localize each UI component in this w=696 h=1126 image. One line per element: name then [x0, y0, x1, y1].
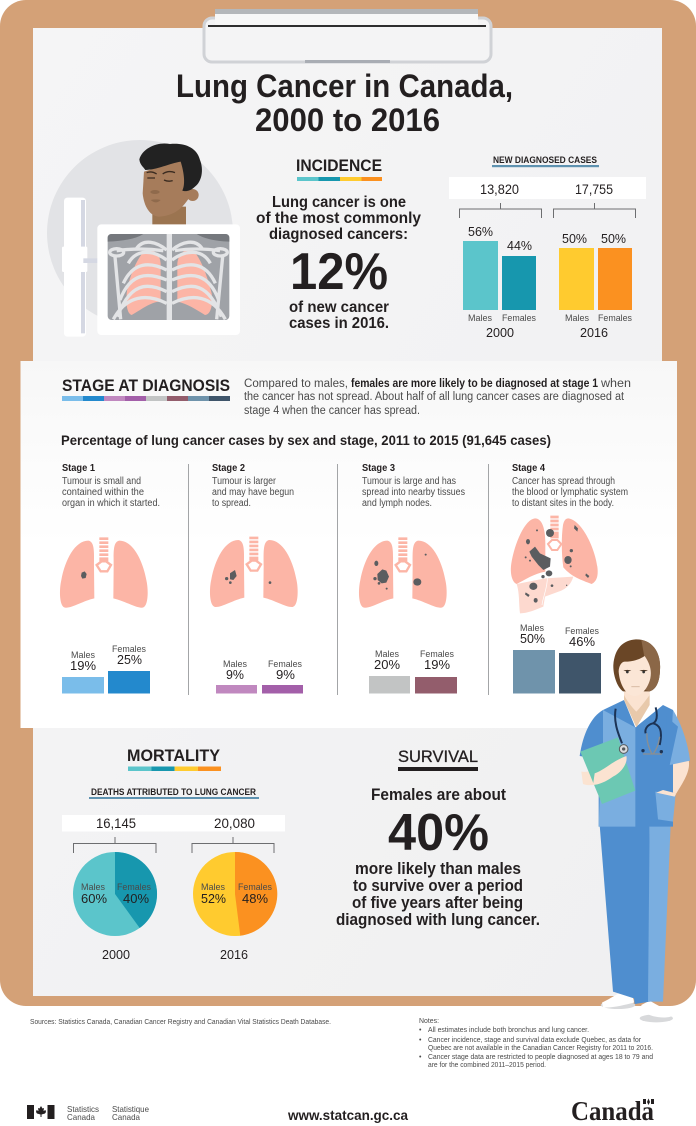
stage 4 column: to distant sites in the body.: [512, 498, 614, 509]
logo: Statistics Canada signature: Statistique: [112, 1104, 149, 1114]
stage 2 column: Tumour is larger: [212, 476, 277, 487]
incidence statement: [256, 194, 421, 332]
clipboard clip: [204, 9, 491, 63]
chart: new diagnosed cases: Males: [565, 313, 589, 324]
title: Lung Cancer in Canada,: [176, 68, 513, 104]
illustration: patient chest x-ray: [47, 140, 240, 337]
paper sheet: [33, 28, 662, 996]
heading: incidence: INCIDENCE: [296, 157, 382, 175]
pie: 2000: 60%: [81, 892, 107, 906]
stage 1 column: Females: [112, 644, 146, 655]
stage 3 column: and lymph nodes.: [362, 498, 432, 509]
pie: 2000: Males: [81, 882, 105, 893]
panel: stage at diagnosis: [20, 361, 677, 728]
pie: 2016: Males: [201, 882, 225, 893]
notes: All estimates include both bronchus and lung cancer.: [428, 1027, 589, 1034]
chart: new diagnosed cases: [449, 155, 646, 340]
stage 2 column: to spread.: [212, 498, 251, 509]
stage 2 column: Stage 2: [212, 463, 245, 474]
stage 3 column: spread into nearby tissues: [362, 487, 465, 498]
stage summary text: the cancer has not spread. About half of all lung cancer cases are diagnosed at: [244, 391, 625, 403]
stage summary text: stage 4 when the cancer has spread.: [244, 405, 420, 417]
incidence statement: of new cancer: [289, 299, 389, 316]
chart: deaths attributed to lung cancer: 16,145: [96, 816, 136, 831]
stage 3 column: Females: [420, 649, 454, 660]
notes: Notes:: [419, 1018, 439, 1025]
stage 4 column: Stage 4: [512, 463, 545, 474]
notes: are for the combined 2011–2015 period.: [428, 1062, 546, 1069]
chart: deaths attributed to lung cancer: DEATHS ATTRIBUTED TO LUNG CANCER: [91, 787, 256, 797]
stage 3 column: [359, 463, 465, 694]
stage summary text: females are more likely to be diagnosed at stage 1: [351, 378, 599, 390]
stage 2 column: 9%: [226, 668, 244, 682]
stage 4 column: the blood or lymphatic system: [512, 487, 628, 498]
website: www.statcan.gc.ca: [287, 1107, 408, 1123]
stage 2 column: Males: [223, 659, 247, 670]
stage 4 column: [511, 463, 628, 694]
chart: new diagnosed cases: 50%: [601, 232, 626, 246]
stage dividers: [188, 464, 488, 695]
chart: new diagnosed cases: 13,820: [480, 182, 519, 197]
heading: stage at diagnosis: STAGE AT DIAGNOSIS: [62, 377, 230, 395]
stage summary text: when: [600, 378, 631, 390]
title: [176, 68, 513, 138]
lungs: stage 3: [359, 537, 447, 608]
stage 1 column: [60, 463, 160, 694]
chart: new diagnosed cases: Females: [598, 313, 632, 324]
chart: new diagnosed cases: 56%: [468, 225, 493, 239]
heading: survival: SURVIVAL: [398, 747, 478, 766]
logo: Canada wordmark: Canada: [571, 1096, 654, 1126]
chart: new diagnosed cases: 17,755: [575, 182, 613, 197]
notes: •: [419, 1027, 422, 1034]
stage 2 column: and may have begun: [212, 487, 294, 498]
stage 4 column: 46%: [569, 635, 595, 649]
stage 4 column: Males: [520, 623, 544, 634]
incidence statement: of the most commonly: [256, 210, 421, 227]
stage 1 column: Tumour is small and: [62, 476, 141, 487]
chart: new diagnosed cases: 2000: [486, 325, 514, 340]
chart: new diagnosed cases: 2016: [580, 325, 608, 340]
stage 4 column: 50%: [520, 632, 545, 646]
pie: 2000: Females: [117, 882, 151, 893]
stage 2 column: Females: [268, 659, 302, 670]
stage summary text: Compared to males,: [244, 378, 348, 390]
pie: 2016: [193, 852, 277, 936]
incidence statement: Lung cancer is one: [272, 194, 406, 211]
logo: Statistics Canada signature: Canada: [67, 1112, 95, 1122]
incidence statement: 12%: [290, 243, 388, 301]
survival statement: diagnosed with lung cancer.: [336, 910, 540, 929]
stage 1 column: Stage 1: [62, 463, 95, 474]
chart: new diagnosed cases: Females: [502, 313, 536, 324]
stage 2 column: 9%: [276, 668, 295, 682]
stage 3 column: Tumour is large and has: [362, 476, 456, 487]
chart: deaths attributed to lung cancer: 2000: [102, 947, 130, 962]
pie: 2016: 48%: [242, 892, 268, 906]
title: 2000 to 2016: [255, 102, 440, 138]
notes: Quebec are not available in the Canadian Cancer Registry for 2011 to 2016.: [428, 1045, 653, 1052]
notes: •: [419, 1037, 422, 1044]
stage 4 column: Females: [565, 626, 599, 637]
chart: new diagnosed cases: 44%: [507, 239, 532, 253]
logo: Statistics Canada signature: [27, 1104, 149, 1122]
sources: Sources: Statistics Canada, Canadian Cancer Registry and Canadian Vital Statistics Death Database.: [30, 1019, 331, 1026]
survival statement: of five years after being: [352, 893, 523, 912]
incidence statement: diagnosed cancers:: [269, 226, 408, 243]
stage 1 column: Males: [71, 650, 95, 661]
survival statement: more likely than males: [355, 859, 521, 878]
lungs: stage 2: [210, 537, 298, 607]
pie: 2016: 52%: [201, 892, 226, 906]
chart: deaths attributed to lung cancer: 2016: [220, 947, 248, 962]
chart: new diagnosed cases: 50%: [562, 232, 587, 246]
stage summary text: [244, 378, 631, 417]
notes: [419, 1018, 653, 1069]
stage 3 column: 20%: [374, 658, 400, 672]
stage 4 column: Cancer has spread through: [512, 476, 615, 487]
survival statement: 40%: [388, 804, 489, 862]
chart: new diagnosed cases: NEW DIAGNOSED CASES: [493, 155, 597, 165]
survival statement: to survive over a period: [353, 876, 523, 895]
lungs: stage 1: [60, 537, 148, 608]
pie: 2000: [73, 852, 157, 936]
notes: Cancer stage data are restricted to people diagnosed at ages 18 to 79 and: [428, 1054, 653, 1061]
incidence statement: cases in 2016.: [289, 315, 389, 332]
chart title: Percentage of lung cancer cases by sex and stage, 2011 to 2015 (91,645 cases): [61, 432, 551, 448]
survival statement: [336, 785, 540, 929]
heading: mortality: MORTALITY: [127, 747, 220, 765]
logo: Statistics Canada signature: Canada: [112, 1112, 140, 1122]
chart: new diagnosed cases: Males: [468, 313, 492, 324]
lungs and liver: stage 4: [511, 516, 598, 613]
notes: Cancer incidence, stage and survival data exclude Quebec, as data for: [428, 1037, 642, 1044]
illustration: nurse: [580, 639, 690, 1022]
pie: 2016: Females: [238, 882, 272, 893]
stage 1 column: 19%: [70, 659, 96, 673]
survival statement: Females are about: [371, 785, 506, 804]
stage 3 column: Males: [375, 649, 399, 660]
stage 2 column: [210, 463, 303, 694]
stage 1 column: 25%: [117, 653, 142, 667]
pie: 2000: 40%: [123, 892, 149, 906]
stage 3 column: 19%: [424, 658, 450, 672]
stage 3 column: Stage 3: [362, 463, 395, 474]
chart: deaths attributed to lung cancer: [62, 787, 285, 962]
stage 1 column: organ in which it started.: [62, 498, 160, 509]
chart: deaths attributed to lung cancer: 20,080: [214, 816, 255, 831]
logo: Statistics Canada signature: Statistics: [67, 1104, 99, 1114]
notes: •: [419, 1054, 422, 1061]
stage 1 column: contained within the: [62, 487, 144, 498]
